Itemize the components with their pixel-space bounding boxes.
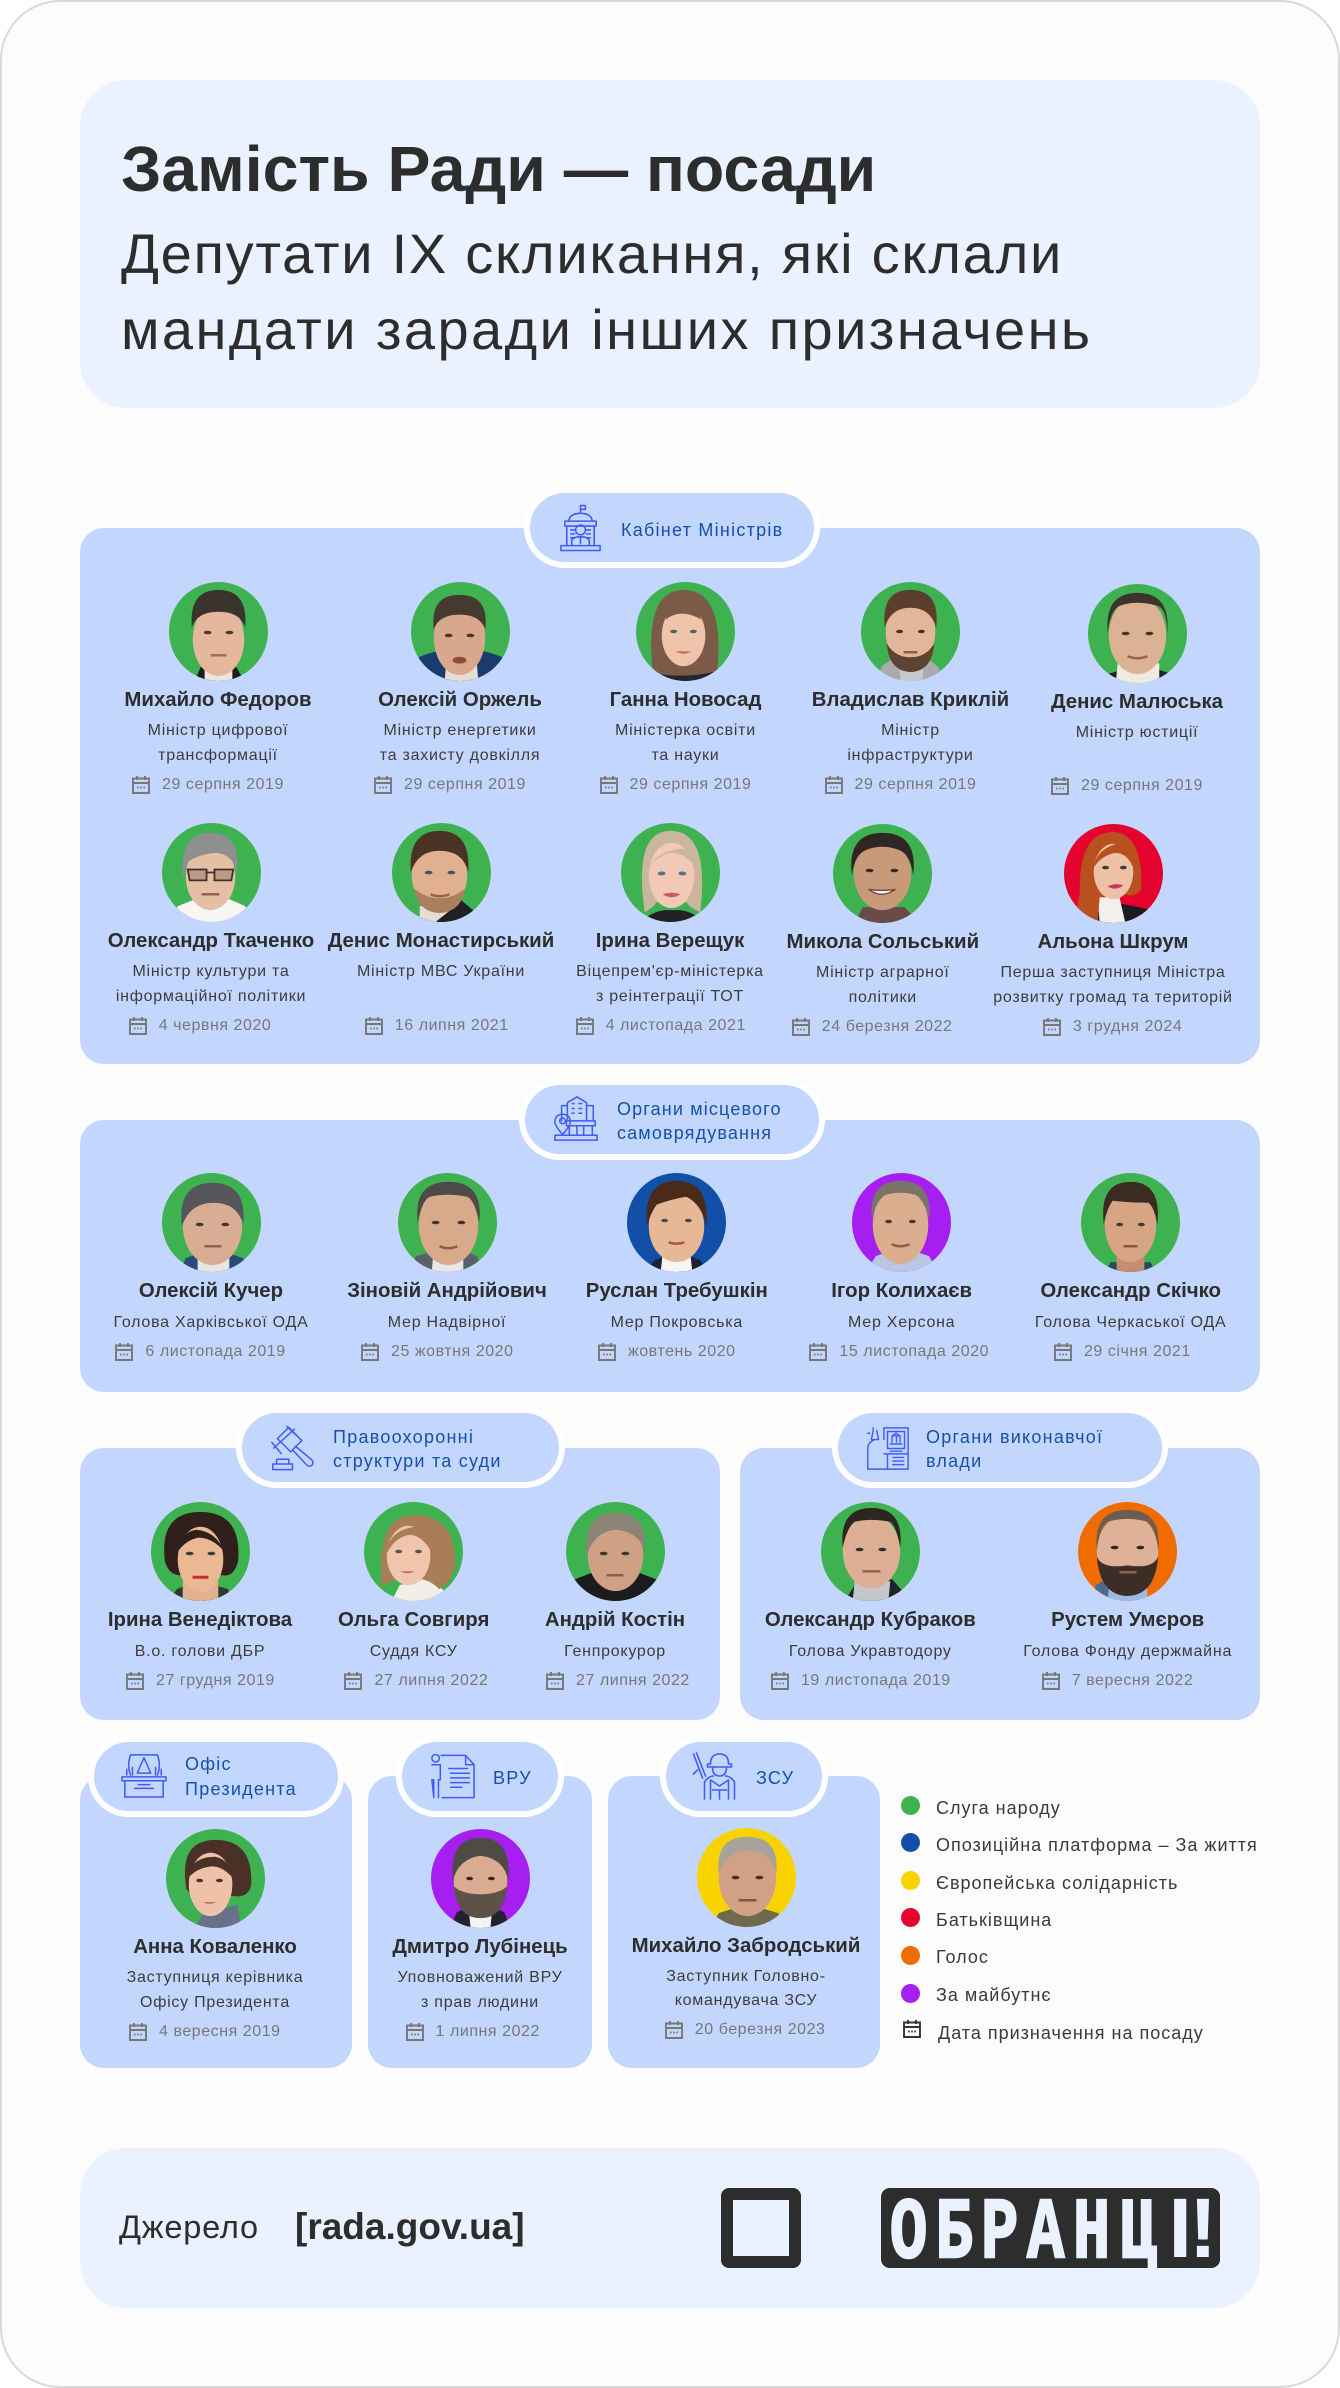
- legend dot: За майбутнє: [900, 1984, 920, 2002]
- label text: Офіс: [185, 1754, 232, 1774]
- name: Андрій Костін: [545, 1609, 685, 1631]
- person: Ольга Совгиря: [289, 1502, 539, 1692]
- legend label: Опозиційна платформа: Опозиційна платформа – За життя: [936, 1834, 1258, 1854]
- label text: самоврядування: [617, 1123, 772, 1143]
- role: Міністр: [881, 722, 940, 739]
- date: 29 серпня 2019: [630, 776, 751, 792]
- date: [546, 1669, 716, 1693]
- person: Ігор Колихаєв: [777, 1173, 1027, 1363]
- role: Голова Черкаської ОДА: [1035, 1314, 1226, 1331]
- avatar: [411, 582, 510, 681]
- person: Олександр Кубраков: [745, 1502, 995, 1692]
- role: Голова Фонду держмайна: [1023, 1643, 1232, 1660]
- subtitle: [121, 222, 1092, 361]
- section label: ЗСУ: [660, 1736, 828, 1817]
- name: Олександр Ткаченко: [108, 930, 314, 952]
- avatar: [1078, 1502, 1177, 1601]
- avatar: [166, 1829, 264, 1928]
- avatar: [636, 582, 735, 681]
- role: Віцепрем'єр-міністерка: [576, 963, 764, 980]
- legend label: Європейська солідарність: Європейська солідарність: [936, 1872, 1178, 1892]
- date: 25 жовтня 2020: [391, 1343, 514, 1360]
- date: 4 листопада 2021: [606, 1016, 746, 1034]
- role: [535, 960, 805, 1009]
- legend label: За майбутнє: За майбутнє: [936, 1985, 1052, 2005]
- person: Олексій Оржель: [374, 582, 542, 794]
- date: 29 січня 2021: [1084, 1343, 1191, 1360]
- icon: person with document: [431, 1754, 475, 1798]
- label text: [926, 1427, 1103, 1471]
- date: 24 березня 2022: [822, 1018, 952, 1035]
- role: Міністр МВС України: [357, 963, 525, 980]
- role: Голова Харківської ОДА: [114, 1314, 308, 1331]
- role: та захисту довкілля: [380, 746, 540, 764]
- name: Михайло Федоров: [124, 689, 312, 711]
- person: Олександр Скічко: [1006, 1173, 1256, 1363]
- person: Микола Сольський: [758, 824, 1008, 1036]
- role: [148, 722, 288, 764]
- panel: footer: [80, 2148, 1260, 2308]
- role: Уповноважений ВРУ: [397, 1969, 563, 1986]
- date: [771, 1669, 941, 1693]
- date: [361, 1340, 531, 1364]
- role: політики: [849, 989, 917, 1006]
- legend dot: Слуга народу: [900, 1796, 920, 1815]
- source label: Джерело: [119, 2209, 259, 2245]
- date: 27 липня 2022: [374, 1672, 488, 1689]
- icon: documents and building: [867, 1427, 909, 1470]
- avatar: [392, 823, 491, 922]
- name: Ірина Верещук: [596, 930, 744, 952]
- person: Анна Коваленко: [90, 1829, 340, 2041]
- panel: header: [80, 80, 1260, 408]
- legend label: Батьківщина: Батьківщина: [936, 1910, 1052, 1930]
- avatar: [1081, 1173, 1180, 1272]
- panel: Кабінет Міністрів: [80, 528, 1260, 1064]
- date: [665, 2018, 835, 2042]
- panel: Офіс Президента: [80, 1776, 352, 2068]
- legend dot: Батьківщина: [900, 1908, 920, 1927]
- date: 4 вересня 2019: [159, 2023, 281, 2040]
- date: 15 листопада 2020: [839, 1343, 989, 1360]
- subtitle: Депутати IX скликання, які склали: [121, 222, 1063, 285]
- label text: структури та суди: [333, 1451, 502, 1471]
- date: 27 липня 2022: [576, 1672, 690, 1689]
- role: з реінтеграції ТОТ: [596, 988, 744, 1004]
- name: Альона Шкрум: [1037, 931, 1189, 953]
- role: Мер Херсона: [848, 1314, 955, 1331]
- label text: влади: [926, 1451, 982, 1471]
- label text: [185, 1754, 297, 1799]
- avatar: [1064, 824, 1162, 923]
- role: Суддя КСУ: [370, 1643, 458, 1660]
- role: інформаційної політики: [116, 988, 306, 1004]
- section label: Органи виконавчої влади: [832, 1407, 1168, 1488]
- title: Замість Ради — посади: [121, 132, 876, 204]
- role: Голова Укравтодору: [789, 1643, 952, 1660]
- name: Денис Монастирський: [328, 930, 554, 952]
- avatar: [162, 1173, 260, 1272]
- role: Міністр юстиції: [1076, 724, 1198, 740]
- name: Ігор Колихаєв: [831, 1280, 972, 1302]
- name: Михайло Забродський: [632, 1935, 860, 1957]
- section label: Правоохоронні структури та суди: [236, 1407, 565, 1488]
- role: Мер Покровська: [611, 1314, 743, 1331]
- date: 29 серпня 2019: [1081, 777, 1203, 794]
- role: [80, 1966, 350, 2015]
- date: [576, 1014, 746, 1038]
- legend dot: Європейська солідарність: [900, 1871, 920, 1890]
- date: 27 грудня 2019: [156, 1672, 275, 1689]
- role: трансформації: [158, 746, 278, 764]
- role: Міністр цифрової: [148, 722, 288, 739]
- date: 6 листопада 2019: [145, 1343, 286, 1360]
- date: [1043, 1015, 1213, 1039]
- role: Міністр енергетики: [383, 722, 537, 739]
- role: [611, 1965, 881, 2014]
- logo: Обранці: [881, 2188, 1220, 2268]
- date: [1042, 1669, 1212, 1693]
- role: [116, 963, 306, 1004]
- role: та науки: [652, 746, 719, 764]
- person: Ірина Верещук: [576, 823, 764, 1035]
- date: 19 листопада 2019: [801, 1672, 951, 1689]
- icon: gavel: [271, 1426, 314, 1470]
- avatar: [821, 1502, 920, 1601]
- role: Мер Надвірної: [388, 1314, 506, 1331]
- person: Михайло Федоров: [124, 582, 312, 794]
- subtitle: мандати заради інших призначень: [121, 298, 1092, 361]
- section label: Кабінет Міністрів: [524, 487, 820, 568]
- role: Міністр культури та: [132, 963, 290, 980]
- date: [792, 1015, 962, 1039]
- role: Міністерка освіти: [615, 722, 756, 739]
- name: Олексій Кучер: [139, 1280, 283, 1302]
- role: [847, 722, 974, 764]
- section label: Органи місцевого самоврядування: [519, 1079, 825, 1160]
- date: 29 серпня 2019: [404, 776, 526, 792]
- date: [129, 2020, 299, 2044]
- name: Анна Коваленко: [133, 1936, 297, 1958]
- name: Олександр Скічко: [1040, 1280, 1221, 1302]
- name: Ганна Новосад: [610, 689, 761, 711]
- person: Дмитро Лубінець: [355, 1829, 605, 2041]
- legend label: Дата призначення на посаду: Дата призначення на посаду: [938, 2023, 1204, 2043]
- date: [126, 1669, 296, 1693]
- label text: ЗСУ: [756, 1768, 794, 1788]
- date: [1054, 1340, 1224, 1364]
- name: Микола Сольський: [786, 931, 979, 953]
- date: [406, 2020, 576, 2044]
- icon: podium: [121, 1754, 167, 1798]
- label text: [617, 1099, 782, 1143]
- avatar: [566, 1502, 664, 1601]
- person: Зіновій Андрійович: [322, 1173, 572, 1363]
- name: Рустем Умєров: [1051, 1609, 1204, 1631]
- legend label: Слуга народу: Слуга народу: [936, 1798, 1061, 1818]
- person: Владислав Криклій: [812, 582, 1009, 794]
- label text: Президента: [185, 1779, 297, 1799]
- panel: ВРУ: [368, 1776, 592, 2068]
- avatar: [852, 1173, 951, 1272]
- date: 7 вересня 2022: [1072, 1672, 1193, 1689]
- date: 4 червня 2020: [159, 1016, 271, 1034]
- person: Олександр Ткаченко: [108, 823, 314, 1035]
- avatar: [627, 1173, 726, 1272]
- avatar: [430, 1829, 530, 1928]
- name: Олексій Оржель: [378, 689, 542, 711]
- date: [598, 1340, 768, 1364]
- avatar: [833, 824, 932, 923]
- role: [615, 722, 756, 764]
- date: 29 серпня 2019: [162, 776, 284, 792]
- avatar: [162, 823, 261, 922]
- avatar: [861, 582, 960, 681]
- label text: Органи місцевого: [617, 1099, 782, 1119]
- person: Альона Шкрум: [988, 824, 1238, 1036]
- role: розвитку громад та територій: [993, 989, 1233, 1006]
- role: [380, 722, 540, 764]
- icon: city building and pin: [554, 1096, 598, 1141]
- avatar: [150, 1502, 250, 1601]
- avatar: [364, 1502, 463, 1601]
- role: Перша заступниця Міністра: [1000, 964, 1226, 981]
- panel: Правоохоронні структури та суди: [80, 1448, 720, 1720]
- role: В.о. голови ДБР: [135, 1643, 265, 1660]
- date: [809, 1340, 979, 1364]
- name: Дмитро Лубінець: [392, 1936, 568, 1958]
- avatar: [398, 1173, 496, 1272]
- role: Офісу Президента: [140, 1994, 290, 2011]
- icon: government building: [560, 504, 601, 552]
- date: [344, 1669, 514, 1693]
- name: Руслан Требушкін: [586, 1280, 768, 1302]
- legend dot: Опозиційна платформа: [900, 1833, 920, 1852]
- person: Олексій Кучер: [86, 1173, 336, 1363]
- label text: ВРУ: [493, 1768, 532, 1788]
- date: 3 грудня 2024: [1073, 1018, 1182, 1035]
- role: [978, 961, 1248, 1010]
- person: Михайло Забродський: [621, 1828, 871, 2040]
- role: командувача ЗСУ: [675, 1992, 817, 2009]
- date: 20 березня 2023: [695, 2021, 826, 2038]
- role: інфраструктури: [847, 746, 974, 764]
- name: Ольга Совгиря: [338, 1609, 489, 1631]
- label text: Кабінет Міністрів: [621, 520, 783, 540]
- legend: [895, 1790, 1265, 2045]
- section label: Офіс Президента: [88, 1736, 344, 1817]
- name: Зіновій Андрійович: [347, 1280, 547, 1302]
- panel: Органи місцевого самоврядування: [80, 1120, 1260, 1392]
- source link: [rada.gov.ua]: [295, 2206, 525, 2247]
- name: Денис Малюська: [1051, 690, 1223, 712]
- panel: Органи виконавчої влади: [740, 1448, 1260, 1720]
- person: Руслан Требушкін: [552, 1173, 802, 1363]
- person: Ірина Венедіктова: [75, 1502, 325, 1692]
- date: 29 серпня 2019: [854, 776, 976, 792]
- role: Генпрокурор: [564, 1643, 666, 1660]
- role: Заступниця керівника: [127, 1969, 303, 1986]
- date: 16 липня 2021: [395, 1016, 509, 1034]
- person: Денис Монастирський: [328, 823, 554, 1035]
- role: [748, 961, 1018, 1010]
- role: [345, 1966, 615, 2015]
- role: Міністр аграрної: [816, 964, 950, 981]
- avatar: [696, 1828, 796, 1927]
- role: з прав людини: [421, 1994, 539, 2011]
- avatar: [1088, 584, 1187, 683]
- logo: square: [721, 2188, 801, 2268]
- panel: ЗСУ: [608, 1776, 880, 2068]
- label text: Правоохоронні: [333, 1427, 474, 1447]
- label text: Органи виконавчої: [926, 1427, 1103, 1447]
- role: Заступник Головно-: [666, 1968, 826, 1985]
- name: Ірина Венедіктова: [108, 1609, 292, 1631]
- avatar: [169, 582, 268, 681]
- person: Андрій Костін: [490, 1502, 740, 1692]
- legend label: Голос: Голос: [936, 1947, 989, 1967]
- person: Денис Малюська: [1051, 584, 1224, 795]
- icon: soldier: [692, 1752, 736, 1800]
- name: Владислав Криклій: [812, 689, 1009, 711]
- legend dot: Голос: [900, 1946, 920, 1964]
- name: Олександр Кубраков: [765, 1609, 976, 1631]
- date: 1 липня 2022: [436, 2023, 540, 2040]
- legend icon: calendar: [902, 2018, 920, 2038]
- date: [115, 1340, 285, 1364]
- label text: [333, 1427, 502, 1471]
- person: Рустем Умєров: [1003, 1502, 1253, 1692]
- date: жовтень 2020: [628, 1343, 736, 1360]
- section label: ВРУ: [396, 1736, 564, 1817]
- avatar: [621, 823, 720, 922]
- person: Ганна Новосад: [600, 582, 762, 794]
